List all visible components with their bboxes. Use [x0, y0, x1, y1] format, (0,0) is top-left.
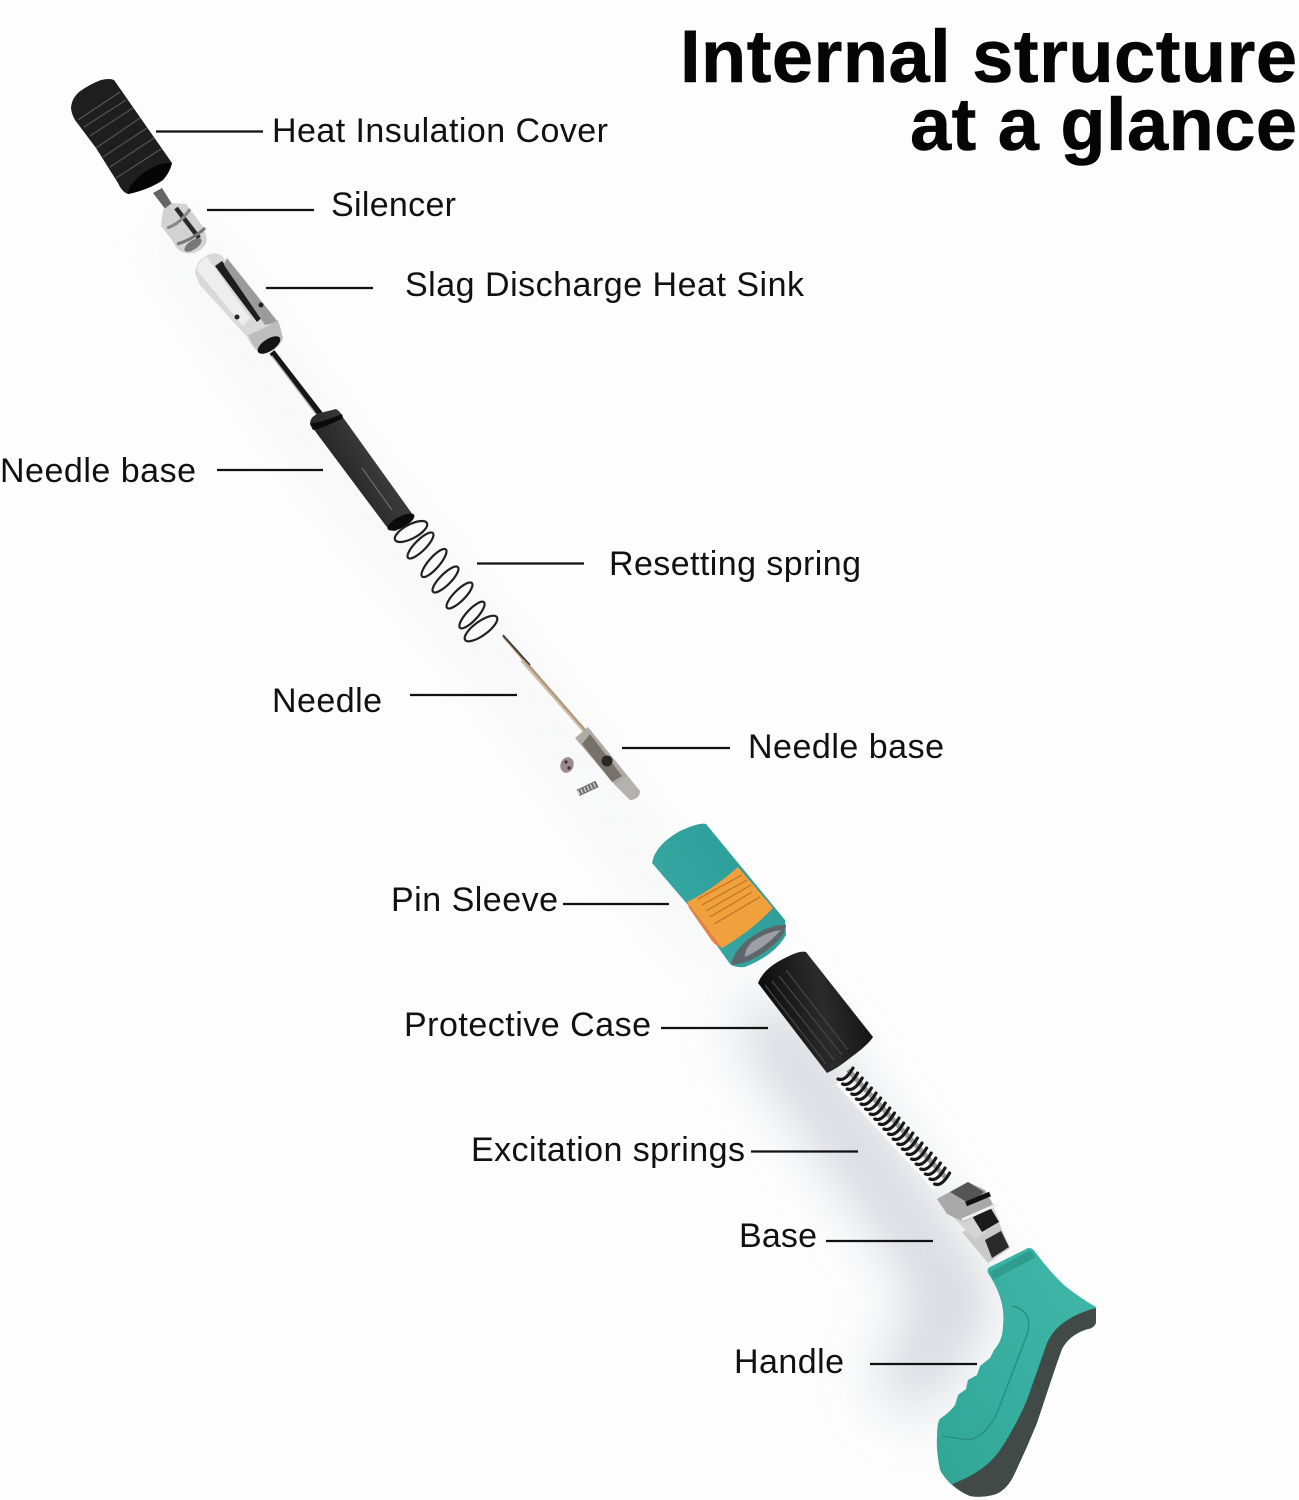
label: resetting spring: Resetting spring	[609, 545, 861, 583]
label: needle: Needle	[272, 682, 382, 720]
part: heat insulation cover	[71, 79, 172, 194]
part: small screw	[578, 784, 597, 793]
part: silencer	[153, 188, 207, 254]
title: at a glance	[910, 83, 1297, 166]
part: slag discharge heat sink	[195, 253, 283, 357]
title: Internal structure	[680, 15, 1297, 98]
label: silencer: Silencer	[331, 186, 456, 224]
label: pin sleeve: Pin Sleeve	[391, 881, 558, 919]
part: protective case	[758, 952, 873, 1073]
part: base	[937, 1182, 1010, 1263]
label: excitation springs: Excitation springs	[471, 1131, 745, 1169]
label: base: Base	[739, 1217, 817, 1255]
label: protective case: Protective Case	[404, 1006, 651, 1044]
label: needle base left: Needle base	[0, 452, 196, 490]
part: pin sleeve	[652, 824, 786, 967]
part: needle	[503, 635, 590, 737]
title	[680, 15, 1297, 166]
part: needle base small	[575, 727, 640, 800]
soft shadows	[170, 230, 960, 1400]
part: push rod	[272, 352, 320, 414]
part: small pin	[558, 755, 576, 775]
label: heat insulation cover: Heat Insulation Cover	[272, 112, 608, 150]
label: slag discharge heat sink: Slag Discharge Heat Sink	[405, 266, 805, 304]
label: needle base right: Needle base	[748, 728, 944, 766]
part: resetting spring	[392, 517, 501, 646]
part: excitation springs	[838, 1068, 950, 1186]
part: handle	[937, 1248, 1096, 1497]
label: handle: Handle	[734, 1343, 844, 1381]
part: needle base dark tube	[310, 409, 417, 534]
